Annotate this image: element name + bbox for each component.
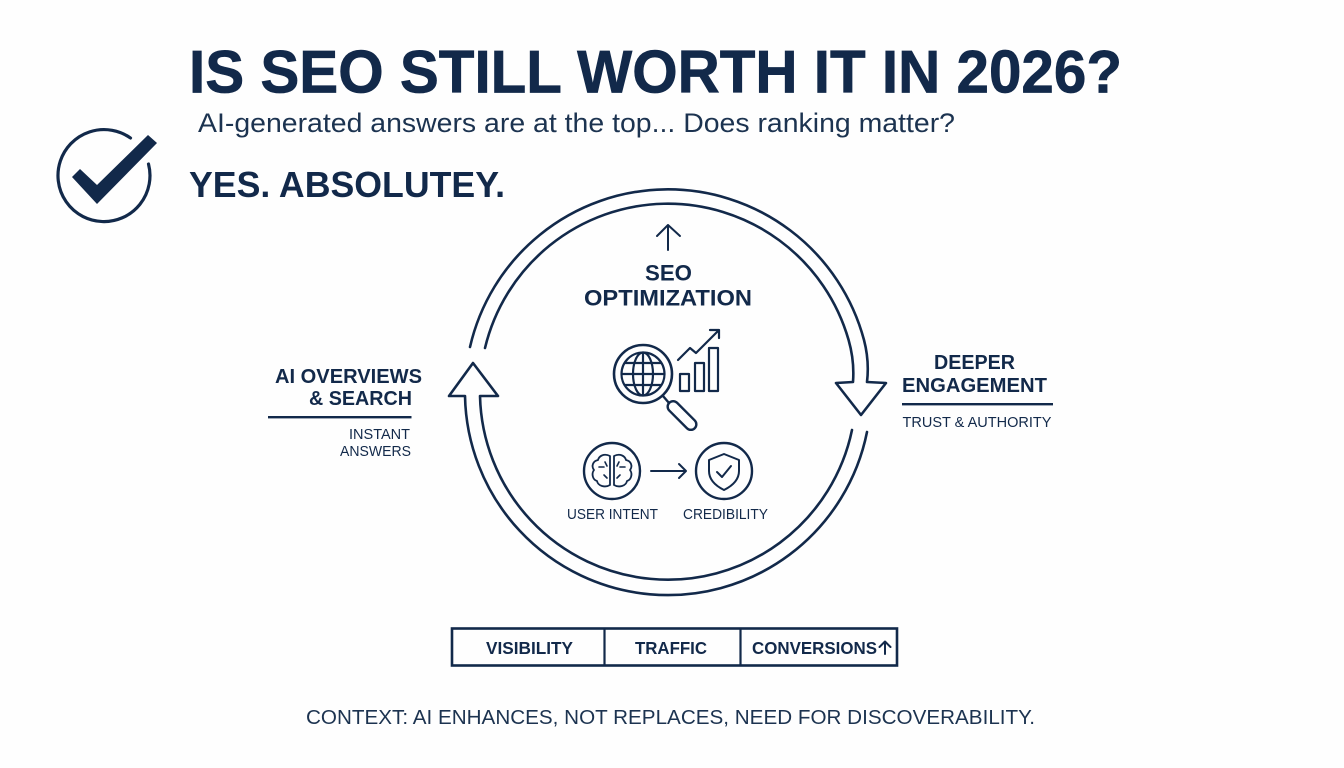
- metrics table: [452, 628, 897, 666]
- icon: magnifier with globe: [614, 345, 699, 432]
- label: user intent: USER INTENT: [567, 507, 658, 523]
- icon: check mark in circle: [58, 130, 157, 222]
- heading: SEO optimization: [584, 260, 752, 310]
- icon: growth bar chart: [678, 330, 719, 391]
- arrow: intent to credibility: [651, 464, 686, 478]
- cell: conversions: CONVERSIONS: [752, 638, 877, 658]
- cell: traffic: TRAFFIC: [635, 638, 707, 658]
- icon: conversions up arrow: [880, 642, 890, 654]
- subtitle: AI-generated answers are at the top... Does ranking matter?: [198, 108, 955, 138]
- right label: deeper engagement: DEEPER: [934, 351, 1015, 374]
- heading: SEO optimization: OPTIMIZATION: [584, 286, 752, 310]
- left label: AI overviews and search: & SEARCH: [309, 387, 412, 410]
- bottom arc with left arrow: [449, 363, 867, 595]
- title: IS SEO STILL WORTH IT IN 2026?: [189, 38, 1122, 106]
- cycle diagram ring with arrows: [449, 189, 886, 595]
- icon: up arrow: [657, 225, 680, 250]
- icon: shield with check in circle: [696, 443, 752, 499]
- right label: deeper engagement: TRUST & AUTHORITY: [902, 415, 1052, 431]
- left label: AI overviews and search: [268, 365, 422, 460]
- left label: AI overviews and search: ANSWERS: [340, 444, 411, 460]
- right label: deeper engagement: ENGAGEMENT: [902, 374, 1047, 397]
- right label: deeper engagement: [902, 351, 1053, 431]
- left label: AI overviews and search: AI OVERVIEWS: [275, 365, 422, 388]
- icon: brain in circle: [584, 443, 640, 499]
- footer context line: CONTEXT: AI ENHANCES, NOT REPLACES, NEED FOR DISCOVERABILITY.: [306, 707, 1035, 729]
- label: credibility: CREDIBILITY: [683, 507, 768, 523]
- left label: AI overviews and search: INSTANT: [349, 427, 410, 443]
- cell: visibility: VISIBILITY: [486, 638, 573, 658]
- top arc with right arrow: [470, 189, 886, 415]
- answer heading: YES. ABSOLUTEY.: [189, 164, 505, 205]
- heading: SEO optimization: SEO: [645, 260, 692, 286]
